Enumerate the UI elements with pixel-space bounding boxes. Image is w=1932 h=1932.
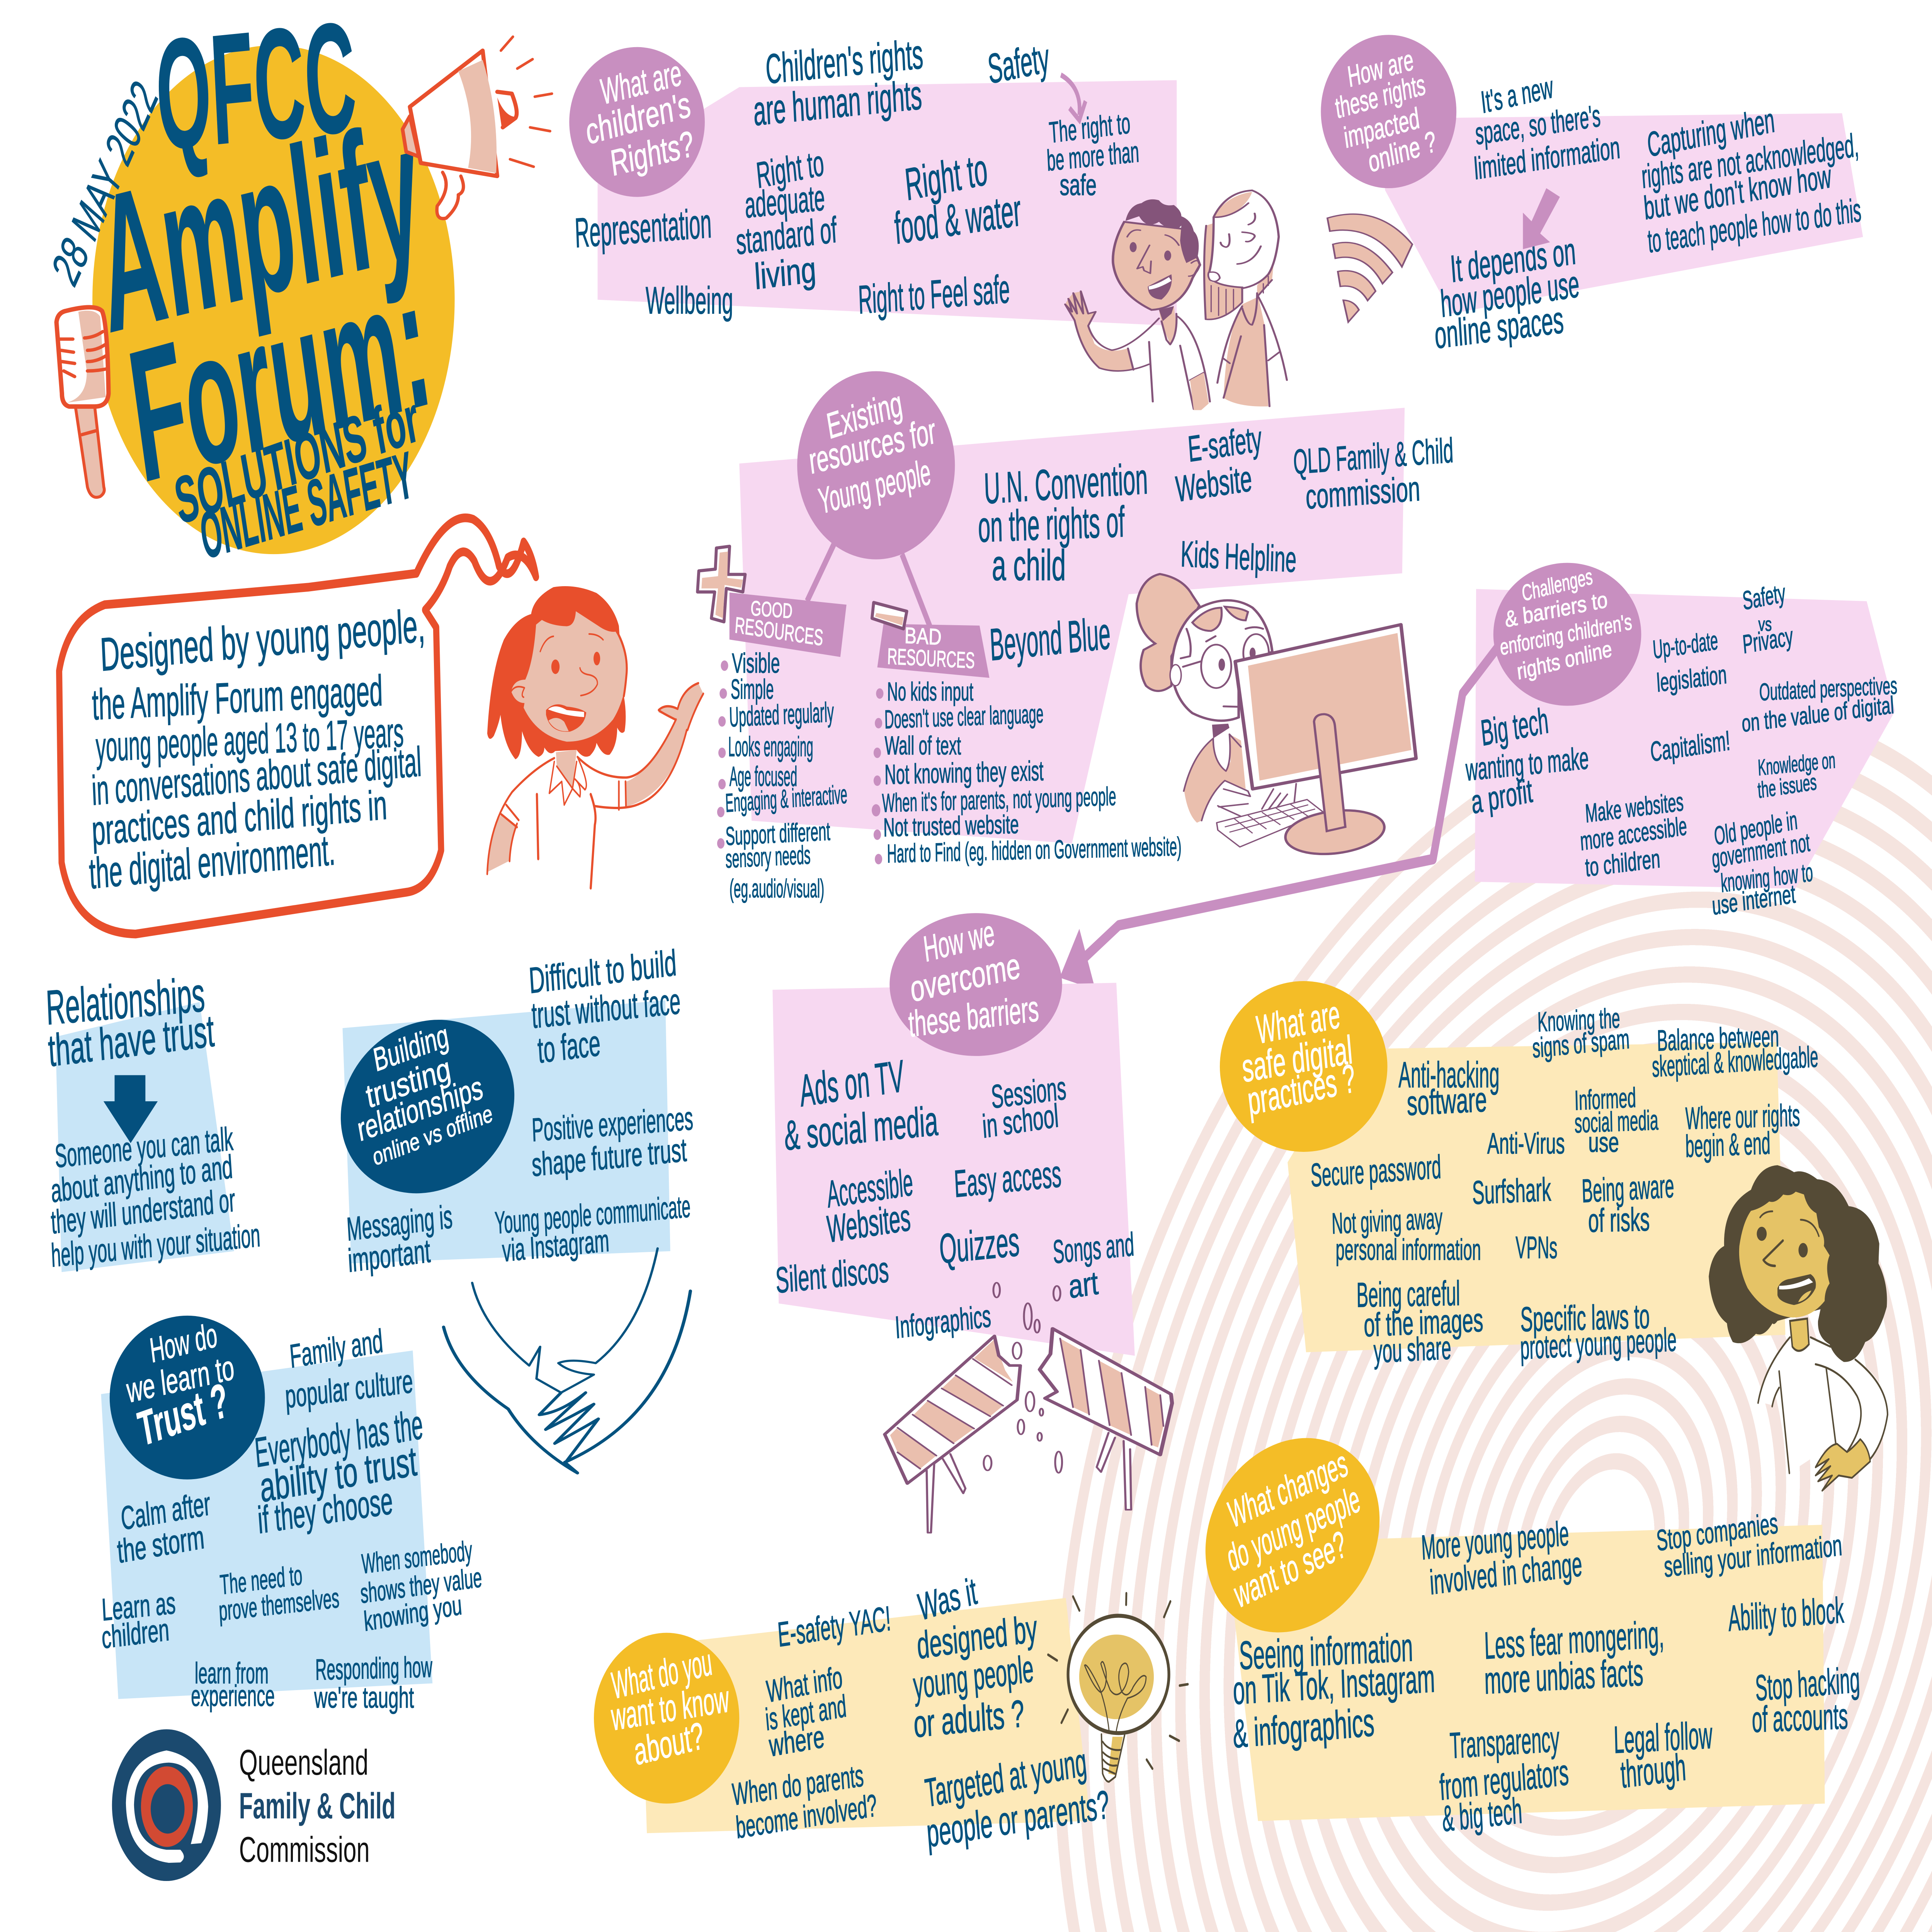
building trust text: Young people communicate xyxy=(494,1188,691,1240)
heading bubble: what are children's rights: children's xyxy=(583,84,693,153)
resource names xyxy=(978,418,1454,670)
description text: they will understand or xyxy=(50,1181,236,1241)
heading bubble: safe digital: practices ? xyxy=(1245,1056,1357,1124)
heading bubble: what changes: want to see? xyxy=(1230,1522,1350,1617)
practices text: Informed xyxy=(1574,1082,1636,1116)
trust text: experience xyxy=(191,1680,275,1713)
icon: wifi xyxy=(1327,214,1412,322)
description text: help you with your situation xyxy=(50,1216,261,1274)
icon: megaphone xyxy=(403,37,552,219)
trust text: we're taught xyxy=(314,1681,414,1714)
solutions text: Accessible xyxy=(825,1161,914,1216)
heading bubble: want to know: What do you xyxy=(609,1640,714,1708)
impacted text: rights are not acknowledged, xyxy=(1640,126,1860,195)
icon: broken barrier xyxy=(885,1283,1172,1533)
heading bubble: learn to trust: Trust ? xyxy=(134,1373,232,1457)
heading bubble: building relationships: relationships xyxy=(355,1068,485,1148)
building trust text: important xyxy=(347,1232,432,1279)
trust text: Learn as xyxy=(101,1585,176,1627)
changes text: Legal follow xyxy=(1613,1714,1713,1762)
trust text: ability to trust xyxy=(258,1437,418,1511)
heading bubble: what changes: What changes xyxy=(1225,1442,1351,1536)
resource names: E-safety xyxy=(1187,418,1263,470)
impacted text xyxy=(1433,69,1862,357)
challenges text: legislation xyxy=(1656,660,1728,697)
heading bubble: what are children's rights: Rights? xyxy=(608,123,696,184)
solutions text: Silent discos xyxy=(775,1249,890,1301)
changes text: Stop hacking xyxy=(1754,1660,1861,1709)
list: bad resources: When it's for parents, not young people xyxy=(882,782,1116,818)
solutions text: Websites xyxy=(825,1196,912,1251)
trust text: popular culture xyxy=(284,1362,414,1415)
title block xyxy=(44,0,455,573)
bad resources banner xyxy=(877,622,990,678)
character: curly-haired girl xyxy=(1709,1165,1888,1491)
heading bubble: what are children's rights: What are xyxy=(599,53,684,112)
practices text: Specific laws to xyxy=(1520,1296,1650,1339)
challenges text: more accessible xyxy=(1579,811,1688,856)
practices text xyxy=(1310,1003,1819,1370)
resource names: Beyond Blue xyxy=(989,607,1112,670)
heading bubble: learn to trust: How do xyxy=(148,1315,219,1370)
panel: what changes do young people want to see xyxy=(1188,1408,1861,1840)
trust text: Calm after xyxy=(119,1485,212,1537)
arrow: challenges to overcoming barriers xyxy=(1060,648,1497,990)
panel: existing resources xyxy=(697,371,1454,903)
list: good resources: Updated regularly xyxy=(729,697,834,733)
changes text: from regulators xyxy=(1439,1752,1570,1808)
good resources banner: RESOURCES xyxy=(734,612,824,651)
resource names: commission xyxy=(1305,469,1421,516)
rights text xyxy=(574,30,1140,323)
impacted text: It's a new xyxy=(1479,69,1555,120)
icon: minus xyxy=(872,602,907,629)
trust text xyxy=(100,1322,483,1714)
resource names: a child xyxy=(992,541,1066,590)
rights text: Wellbeing xyxy=(646,279,733,322)
challenges text: Knowledge on xyxy=(1757,747,1836,781)
questions text: people or parents? xyxy=(925,1782,1111,1856)
trust text: knowing you xyxy=(362,1589,463,1637)
bad resources banner: RESOURCES xyxy=(887,643,975,673)
rights text: Children's rights xyxy=(765,30,924,93)
solutions text: & social media xyxy=(783,1097,939,1159)
changes text: More young people xyxy=(1420,1514,1570,1567)
heading bubble: challenges: & barriers to xyxy=(1503,587,1609,632)
resource names: Website xyxy=(1174,458,1253,510)
practices text: software xyxy=(1406,1080,1487,1123)
building trust text: to face xyxy=(536,1023,602,1071)
rights text: food & water xyxy=(893,184,1023,254)
heading bubble: rights online xyxy=(1321,35,1456,188)
heading bubble: overcome barriers: overcome xyxy=(908,945,1022,1010)
subtitle line one: SOLUTIONS for xyxy=(170,382,424,538)
list: good resources: (eg.audio/visual) xyxy=(730,874,824,903)
practices text: Being aware xyxy=(1581,1167,1675,1209)
good resources banner xyxy=(730,592,847,657)
practices text: Surfshark xyxy=(1472,1171,1552,1211)
building trust text xyxy=(345,942,694,1279)
rights text: be more than xyxy=(1046,135,1140,177)
heading bubble: learn to trust xyxy=(110,1315,265,1480)
heading bubble: what are children's rights xyxy=(569,47,705,197)
heading bubble: learn to trust: we learn to xyxy=(124,1347,236,1410)
rights text: adequate xyxy=(744,177,826,226)
questions text: E-safety YAC! xyxy=(776,1599,892,1654)
heading bubble: challenges: enforcing children's xyxy=(1499,609,1633,660)
practices text: of the images xyxy=(1363,1301,1484,1344)
trust text: prove themselves xyxy=(218,1582,340,1627)
changes text: Transparency xyxy=(1449,1719,1560,1766)
rights text: safe xyxy=(1060,169,1097,202)
heading bubble: want to know: about? xyxy=(631,1714,706,1774)
practices text: you share xyxy=(1373,1329,1452,1370)
practices text: signs of spam xyxy=(1532,1023,1630,1064)
impacted text: but we don't know how xyxy=(1642,157,1833,227)
heading bubble: rights online: online ? xyxy=(1366,125,1439,179)
panel: building trusting relationships xyxy=(331,942,694,1279)
resource names: on the rights of xyxy=(978,497,1125,551)
trust text: Everybody has the xyxy=(253,1401,425,1476)
bad resources banner: BAD xyxy=(904,622,942,650)
logo: Queensland Family and Child Commission: Commission xyxy=(239,1830,370,1869)
challenges text: Up-to-date xyxy=(1652,626,1719,665)
trust text: shows they value xyxy=(359,1562,483,1609)
panel: safe digital practices xyxy=(1220,981,1819,1370)
list: good resources: Engaging & interactive xyxy=(725,780,848,818)
arrow: block arrow down-left xyxy=(1523,188,1560,249)
solutions text: Infographics xyxy=(894,1298,992,1345)
solutions text xyxy=(775,1050,1135,1345)
heading bubble: existing resources: Existing xyxy=(824,383,905,447)
impacted text: It depends on xyxy=(1449,230,1577,291)
resource names: U.N. Convention xyxy=(983,454,1148,513)
icon: holding hands xyxy=(444,1248,690,1473)
challenges text: use internet xyxy=(1711,879,1796,921)
trust text: learn from xyxy=(195,1657,269,1690)
rights text: Safety xyxy=(986,34,1051,92)
logo: Queensland Family and Child Commission: Family & Child xyxy=(239,1786,396,1827)
challenges text: wanting to make xyxy=(1464,740,1590,787)
panel: speech bubble xyxy=(59,518,536,934)
questions text: Targeted at young xyxy=(923,1740,1088,1816)
arrow: down xyxy=(104,1075,158,1143)
changes text: more unbias facts xyxy=(1484,1651,1644,1702)
challenges text: Privacy xyxy=(1742,622,1794,659)
challenges text: the issues xyxy=(1757,769,1818,803)
heading bubble: challenges xyxy=(1493,563,1641,706)
arrow: safety to more than safe xyxy=(1061,75,1085,120)
questions text: is kept and xyxy=(764,1688,848,1737)
challenges text: government not xyxy=(1711,828,1811,874)
logo mark xyxy=(112,1729,221,1881)
rights text: The right to xyxy=(1048,107,1131,150)
list: good resources: sensory needs xyxy=(725,840,811,874)
panel: children's rights xyxy=(569,30,1177,326)
list: bad resources: Not knowing they exist xyxy=(884,755,1044,791)
heading bubble: safe digital: What are xyxy=(1255,992,1342,1053)
rights text: living xyxy=(753,249,817,297)
questions text: or adults ? xyxy=(913,1692,1025,1746)
callout text: in conversations about safe digital xyxy=(91,738,422,814)
character: boy and girl xyxy=(1065,190,1287,410)
heading bubble: want to know xyxy=(594,1633,739,1804)
good resources banner: GOOD xyxy=(750,597,793,623)
changes text: Ability to block xyxy=(1728,1590,1845,1639)
rights text: Right to xyxy=(903,143,990,210)
questions text: young people xyxy=(912,1647,1035,1708)
practices text: Anti-hacking xyxy=(1398,1055,1500,1095)
heading bubble: safe digital: safe digital xyxy=(1240,1027,1354,1091)
practices text: use xyxy=(1588,1127,1619,1158)
changes text: selling your information xyxy=(1663,1529,1843,1584)
questions text xyxy=(731,1570,1111,1856)
callout text: young people aged 13 to 17 years xyxy=(95,708,404,770)
character: red-haired girl xyxy=(487,586,703,888)
building trust text: shape future trust xyxy=(531,1131,688,1184)
panel: what do you want to know about xyxy=(594,1570,1111,1856)
description text xyxy=(50,1120,261,1274)
questions text: designed by xyxy=(915,1607,1039,1667)
logo: Queensland Family and Child Commission xyxy=(112,1729,396,1881)
practices text: Not giving away xyxy=(1331,1202,1443,1240)
logo: Queensland Family and Child Commission: Queensland xyxy=(239,1743,368,1782)
impacted text: how people use xyxy=(1439,262,1581,326)
list: good resources xyxy=(717,648,848,903)
list: good resources: Simple xyxy=(731,674,774,705)
heading bubble: building relationships: Building xyxy=(371,1017,451,1078)
challenges text: on the value of digital xyxy=(1741,691,1895,737)
list: bad resources: Doesn't use clear language xyxy=(884,699,1044,734)
questions text: become involved? xyxy=(735,1787,878,1845)
callout text: Designed by young people, xyxy=(99,599,426,681)
practices text: of risks xyxy=(1588,1201,1650,1239)
heading bubble: overcome barriers: these barriers xyxy=(907,988,1040,1045)
rights text: Right to xyxy=(755,143,826,196)
solutions text: art xyxy=(1067,1264,1100,1305)
description text: about anything to and xyxy=(50,1148,234,1209)
trust text: The need to xyxy=(219,1560,303,1601)
heading bubble: safe digital xyxy=(1220,981,1388,1152)
solutions text: Sessions xyxy=(990,1069,1067,1116)
practices text: begin & end xyxy=(1685,1125,1771,1164)
connector lines xyxy=(807,544,930,628)
heading bubble: want to know: want to know xyxy=(609,1677,731,1739)
subtitle line two: ONLINE SAFETY xyxy=(196,438,418,573)
character: child at computer xyxy=(1137,574,1416,859)
practices text: Where our rights xyxy=(1685,1097,1800,1136)
trust text: Family and xyxy=(288,1322,384,1375)
challenges text: Big tech xyxy=(1479,700,1550,754)
callout text: the digital environment. xyxy=(88,825,336,898)
rights text: Right to Feel safe xyxy=(857,267,1010,323)
solutions text: Songs and xyxy=(1052,1226,1135,1270)
building trust text: via Instagram xyxy=(501,1223,610,1268)
solutions text: Quizzes xyxy=(938,1218,1020,1272)
challenges text: a profit xyxy=(1469,772,1534,821)
resource names: QLD Family & Child xyxy=(1293,430,1454,481)
impacted text: online spaces xyxy=(1433,298,1565,357)
challenges text: Capitalism! xyxy=(1649,725,1731,768)
heading bubble: building relationships: online vs offline xyxy=(371,1100,495,1171)
list: bad resources xyxy=(872,677,1182,868)
icon: plus xyxy=(697,546,745,622)
panel: how we overcome these barriers xyxy=(772,912,1135,1356)
panel: how do we learn to trust xyxy=(100,1315,483,1714)
changes text: through xyxy=(1619,1746,1687,1796)
questions text: Was it xyxy=(915,1570,980,1629)
challenges text: Make websites xyxy=(1584,787,1684,828)
list: good resources: Visible xyxy=(732,648,780,679)
icon: microphone xyxy=(56,307,109,497)
list: good resources: Age focused xyxy=(730,761,797,792)
changes text: Seeing information xyxy=(1239,1625,1413,1678)
title: Forum: Forum: xyxy=(119,235,441,522)
changes text: & infographics xyxy=(1232,1700,1375,1757)
practices text: protect young people xyxy=(1520,1321,1677,1366)
heading bubble: existing resources xyxy=(797,371,955,560)
trust text: When somebody xyxy=(361,1535,473,1580)
practices text: Being careful xyxy=(1356,1274,1460,1315)
heading bubble: building relationships xyxy=(331,1001,524,1212)
challenges text: to children xyxy=(1584,844,1661,882)
solutions text: Easy access xyxy=(953,1152,1062,1206)
trust text: the storm xyxy=(116,1518,206,1570)
list: bad resources: Hard to Find (eg. hidden on Government website) xyxy=(887,832,1182,868)
changes text: Less fear mongering, xyxy=(1484,1612,1665,1667)
challenges text: Outdated perspectives xyxy=(1759,672,1898,706)
rights text: standard of xyxy=(735,209,838,262)
practices text: Anti-Virus xyxy=(1487,1127,1565,1160)
changes text: & big tech xyxy=(1441,1790,1523,1840)
challenges text xyxy=(1464,578,1898,921)
heading bubble: overcome barriers: How we xyxy=(921,912,997,970)
trust text: Responding how xyxy=(315,1651,433,1687)
impacted text: Capturing when xyxy=(1646,100,1776,164)
callout text: practices and child rights in xyxy=(91,781,388,854)
impacted text: space, so there's xyxy=(1474,98,1602,151)
panel: how are these rights impacted online xyxy=(1321,35,1863,357)
changes text xyxy=(1232,1507,1861,1840)
description text: Someone you can talk xyxy=(54,1120,234,1175)
heading bubble: overcome barriers xyxy=(889,912,1062,1056)
changes text: on Tik Tok, Instagram xyxy=(1232,1656,1435,1713)
solutions text: in school xyxy=(981,1097,1060,1145)
practices text: social media xyxy=(1574,1105,1658,1139)
panel: challenges and barriers xyxy=(1060,563,1898,990)
questions text: What info xyxy=(765,1659,844,1709)
list: bad resources: Wall of text xyxy=(885,731,961,760)
solutions text: Ads on TV xyxy=(798,1050,906,1116)
heading bubble: rights online: these rights xyxy=(1333,68,1427,125)
practices text: personal information xyxy=(1336,1233,1481,1267)
challenges text: vs xyxy=(1758,614,1772,635)
title: Amplify: Amplify xyxy=(87,80,432,375)
challenges text: Old people in xyxy=(1713,806,1799,851)
practices text: Knowing the xyxy=(1537,1003,1621,1038)
heading bubble: what changes xyxy=(1188,1408,1397,1662)
rights text: are human rights xyxy=(752,71,923,134)
panel: relationships that have trust xyxy=(45,967,261,1274)
trust text: if they choose xyxy=(256,1479,394,1542)
challenges text: Safety xyxy=(1741,578,1787,616)
heading bubble: existing resources: Young people xyxy=(816,451,933,522)
changes text: Stop companies xyxy=(1655,1507,1779,1558)
heading bubble: existing resources: resources for xyxy=(807,410,938,482)
heading: relationships xyxy=(45,967,216,1076)
challenges text: knowing how to xyxy=(1720,858,1814,898)
trust text: children xyxy=(100,1612,170,1655)
building trust text: Difficult to build xyxy=(528,942,678,1001)
impacted text: limited information xyxy=(1473,129,1621,186)
list: bad resources: Not trusted website xyxy=(883,810,1019,842)
list: bad resources: No kids input xyxy=(887,677,973,706)
heading bubble: challenges: rights online xyxy=(1515,636,1613,684)
heading bubble: what changes: do young people xyxy=(1223,1477,1364,1580)
callout text: the Amplify Forum engaged xyxy=(92,666,383,729)
resource names: Kids Helpline xyxy=(1180,534,1297,580)
callout text xyxy=(88,599,426,898)
list: good resources: Support different xyxy=(725,817,830,851)
building trust text: Positive experiences xyxy=(531,1100,694,1148)
heading bubble: challenges: Challenges xyxy=(1520,563,1594,606)
practices text: Balance between xyxy=(1657,1020,1779,1058)
icon: lightbulb xyxy=(1048,1593,1188,1782)
heading bubble: rights online: How are xyxy=(1346,43,1415,94)
heading: relationships: that have trust xyxy=(47,1005,216,1076)
building trust text: trust without face xyxy=(531,981,681,1036)
heading bubble: rights online: impacted xyxy=(1342,102,1422,155)
list: good resources: Looks engaging xyxy=(728,731,813,762)
questions text: When do parents xyxy=(731,1757,865,1812)
practices text: skeptical & knowledgable xyxy=(1651,1040,1819,1083)
questions text: where xyxy=(767,1719,826,1763)
rights text: Representation xyxy=(574,199,712,256)
heading bubble: building relationships: trusting xyxy=(363,1050,453,1115)
changes text: of accounts xyxy=(1752,1696,1848,1740)
changes text: involved in change xyxy=(1429,1544,1583,1602)
practices text: VPNs xyxy=(1515,1230,1558,1265)
practices text: Secure password xyxy=(1310,1148,1442,1194)
heading: relationships: Relationships xyxy=(45,967,206,1035)
building trust text: Messaging is xyxy=(345,1198,454,1248)
